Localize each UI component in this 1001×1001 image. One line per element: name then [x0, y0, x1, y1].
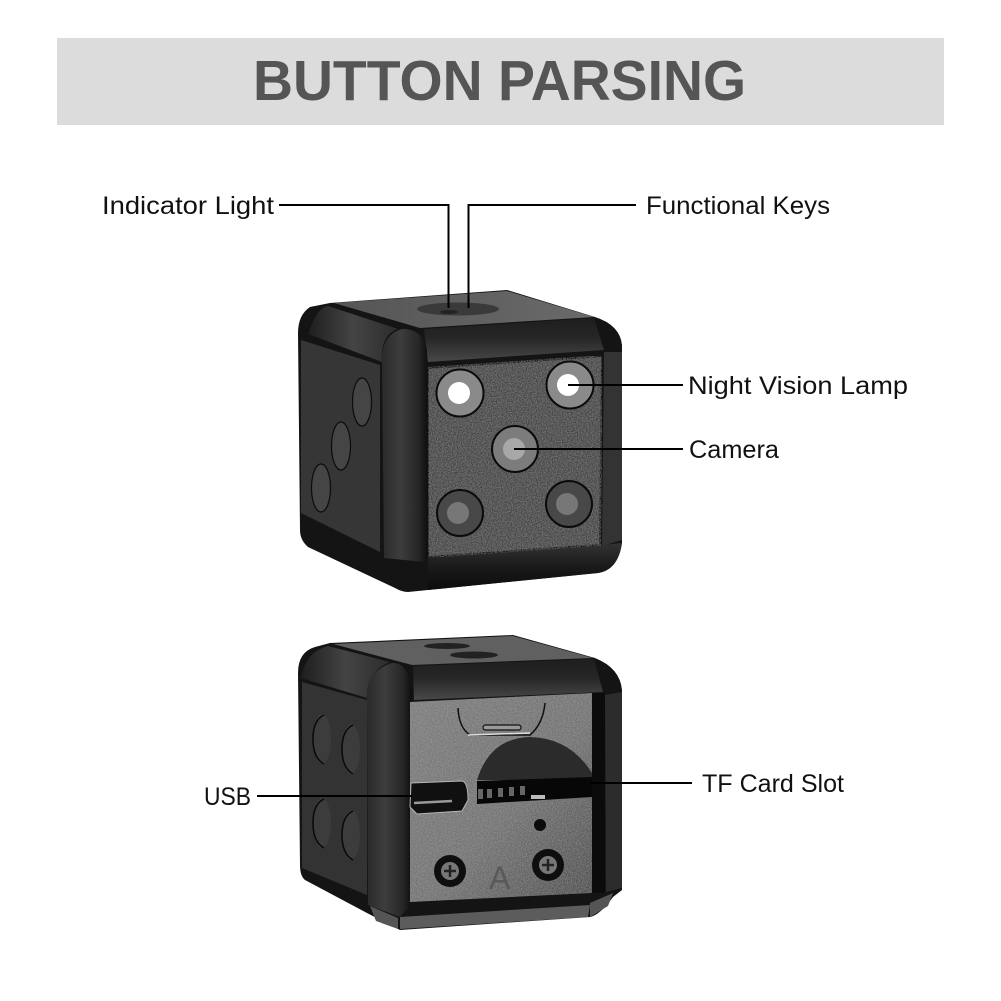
card contacts — [478, 786, 545, 799]
left face — [301, 340, 380, 552]
left face pips — [313, 714, 360, 860]
callout: USB: USB — [204, 783, 251, 811]
camera lens — [492, 426, 538, 472]
LED: upper right night vision lamp — [546, 362, 594, 408]
speaker slot outline — [458, 703, 545, 735]
upper front band — [424, 318, 604, 362]
TF card slot — [477, 737, 592, 804]
callout: TF Card Slot: TF Card Slot — [702, 770, 844, 798]
top buttons — [417, 302, 499, 316]
callout: Indicator Light: Indicator Light — [102, 192, 274, 220]
product photo: camera cube back — [298, 635, 622, 930]
lower front band — [428, 543, 622, 590]
callout: Night Vision Lamp: Night Vision Lamp — [688, 372, 908, 400]
bottom lip — [400, 905, 590, 929]
LED: lower left — [437, 490, 483, 536]
dark side channel — [592, 693, 605, 893]
pip edge arcs — [313, 715, 353, 860]
right screw — [532, 849, 564, 881]
left face pips — [312, 378, 372, 512]
cube body silhouette — [298, 635, 622, 930]
upper front band — [413, 659, 603, 700]
front corner post — [382, 329, 428, 562]
cube body silhouette — [298, 290, 622, 592]
callout: Camera: Camera — [689, 436, 779, 464]
right edge — [605, 692, 622, 892]
top buttons — [424, 643, 498, 658]
top face — [334, 291, 594, 328]
LED: lower right — [546, 481, 592, 527]
left screw — [434, 855, 466, 887]
reset pinhole — [534, 819, 546, 831]
back plate — [410, 693, 593, 902]
embossed letter A: A — [489, 860, 511, 896]
front face plate — [428, 356, 602, 557]
product photo: camera cube front — [298, 290, 622, 592]
callout: Functional Keys — [468, 192, 830, 308]
callout: Indicator Light — [102, 192, 448, 308]
LED: upper left night vision lamp — [436, 370, 484, 416]
upper left band — [308, 306, 398, 362]
corner post — [367, 663, 412, 917]
callout: Functional Keys: Functional Keys — [646, 192, 830, 220]
left face — [302, 682, 367, 895]
USB port — [410, 781, 468, 814]
upper left band — [301, 646, 390, 698]
right edge — [602, 352, 622, 546]
title banner — [57, 38, 944, 125]
title: BUTTON PARSING — [253, 49, 746, 113]
top face — [333, 636, 593, 665]
